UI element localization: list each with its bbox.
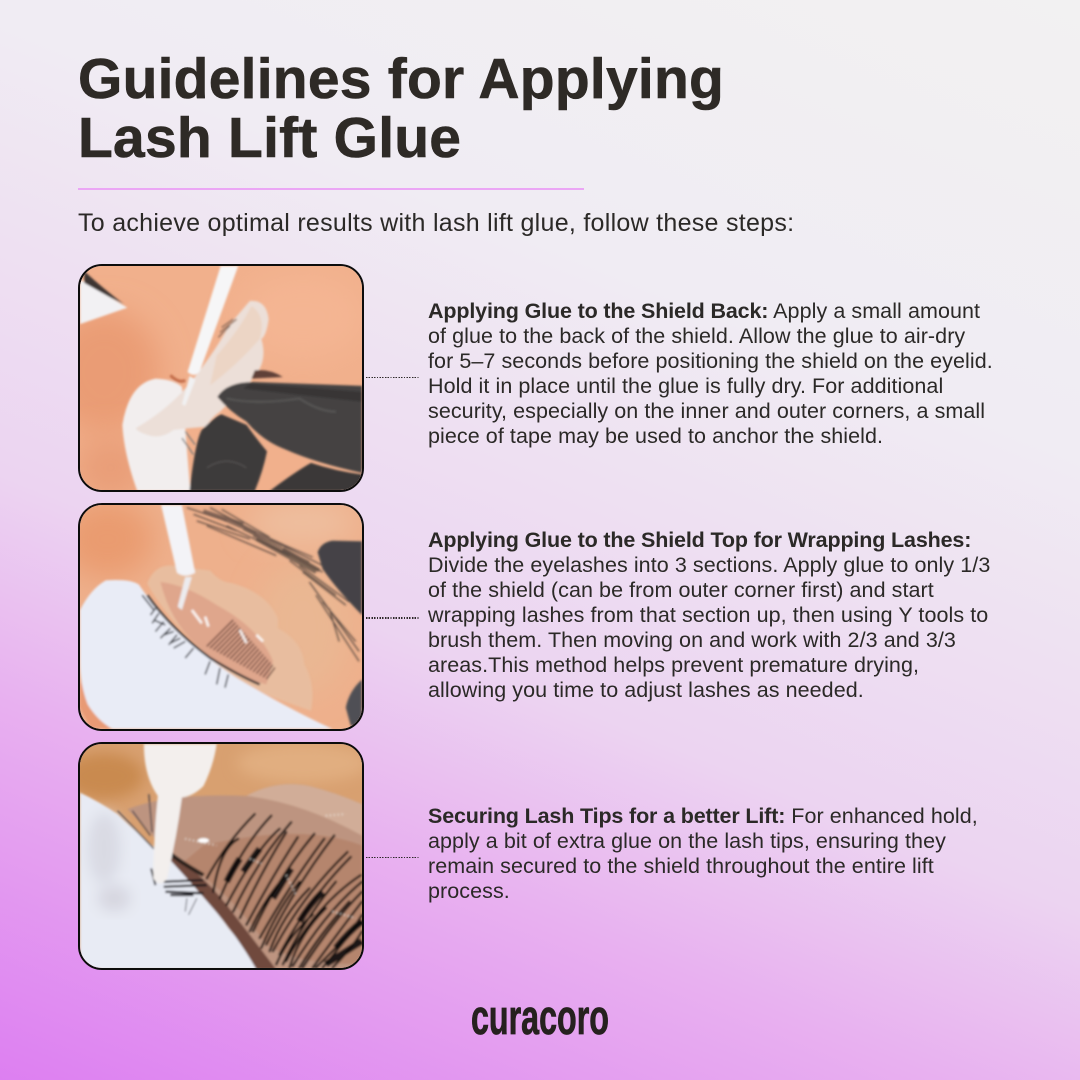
text block: lash tips: process. bbox=[428, 879, 510, 903]
text block: shield top: brush them. Then moving on and work with 2/3 and 3/3 bbox=[428, 628, 956, 652]
dotted connector 2 bbox=[366, 617, 419, 618]
text block: shield back: for 5–7 seconds before positioning the shield on the eyelid. bbox=[428, 349, 993, 373]
text block: lash tips bbox=[428, 804, 978, 903]
photo: securing lash tips bbox=[78, 742, 364, 970]
text block: lash tips: Securing Lash Tips for a better Lift: For enhanced hold, bbox=[428, 804, 978, 828]
dotted connector 1 bbox=[366, 376, 419, 378]
divider rule bbox=[78, 188, 584, 190]
text block: shield top: of the shield (can be from outer corner first) and start bbox=[428, 578, 934, 602]
text block: shield top: Applying Glue to the Shield Top for Wrapping Lashes: bbox=[428, 528, 971, 552]
text block: shield top: areas.This method helps prevent premature drying, bbox=[428, 653, 919, 677]
photo: glue on shield top bbox=[78, 503, 364, 731]
text block: shield top: wrapping lashes from that section up, then using Y tools to bbox=[428, 603, 988, 627]
dotted connector 3 bbox=[366, 856, 419, 858]
title: Lash Lift Glue bbox=[78, 106, 461, 170]
text block: shield back: Applying Glue to the Shield Back: Apply a small amount bbox=[428, 299, 980, 323]
text block: shield back: of glue to the back of the shield. Allow the glue to air-dry bbox=[428, 324, 965, 348]
title bbox=[78, 47, 724, 170]
text block: shield back: Hold it in place until the glue is fully dry. For additional bbox=[428, 374, 943, 398]
text block: shield back: piece of tape may be used to anchor the shield. bbox=[428, 424, 883, 448]
text block: lash tips: remain secured to the shield throughout the entire lift bbox=[428, 854, 934, 878]
text block: shield back bbox=[428, 299, 993, 448]
text block: shield top: allowing you time to adjust lashes as needed. bbox=[428, 678, 864, 702]
photo: glue on shield back bbox=[78, 264, 364, 492]
text block: shield top: Divide the eyelashes into 3 sections. Apply glue to only 1/3 bbox=[428, 553, 990, 577]
lashes on shield bbox=[207, 620, 275, 679]
text block: shield back: security, especially on the inner and outer corners, a small bbox=[428, 399, 985, 423]
text block: shield top bbox=[428, 528, 990, 702]
intro text: To achieve optimal results with lash lift glue, follow these steps: bbox=[78, 209, 794, 237]
text block: lash tips: apply a bit of extra glue on the lash tips, ensuring they bbox=[428, 829, 946, 853]
title: Guidelines for Applying bbox=[78, 47, 724, 111]
